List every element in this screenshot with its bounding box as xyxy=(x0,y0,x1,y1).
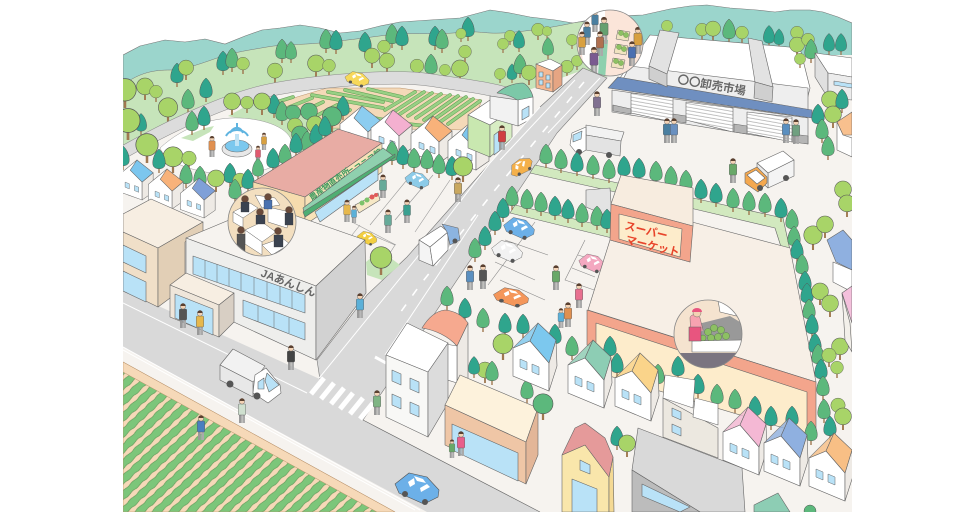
supermarket sign block top xyxy=(611,175,693,226)
front row houses xyxy=(513,323,853,501)
store side wall xyxy=(253,182,305,220)
market sign: 〇〇卸売市場 xyxy=(676,72,747,98)
supermarket right tree column xyxy=(786,209,830,423)
park people xyxy=(209,133,267,163)
JA upper windows xyxy=(193,256,305,313)
trees behind market xyxy=(661,19,847,55)
supermarket main roof xyxy=(588,222,816,382)
JA building xyxy=(186,205,366,360)
small orange building xyxy=(536,59,562,92)
supermarket parking xyxy=(488,222,600,300)
market interior circle outline xyxy=(674,300,742,368)
right edge pink house xyxy=(842,286,852,352)
JA window mullions xyxy=(205,260,292,333)
salmon arch building xyxy=(422,310,468,383)
parked sedans xyxy=(492,218,605,308)
office interior circle xyxy=(228,188,296,262)
supermarket sign text 1: スーパー xyxy=(623,219,669,243)
JA entrance xyxy=(170,273,234,337)
right side round trees xyxy=(804,181,855,440)
right edge blue house xyxy=(827,230,852,292)
supermarket front band xyxy=(587,310,816,432)
small lot tree xyxy=(370,247,392,275)
JA side wall xyxy=(316,240,366,360)
JA name sign: JAあんしん xyxy=(259,267,318,300)
store sign right: ニコニコ館 xyxy=(345,147,384,178)
orange truck xyxy=(745,151,794,192)
near road boundary xyxy=(363,420,540,512)
supermarket sign face xyxy=(610,204,693,262)
yellow roofed house xyxy=(562,423,614,512)
orange car on road xyxy=(507,152,536,182)
grey office bottom xyxy=(632,428,745,512)
JA roof xyxy=(186,205,365,286)
white delivery truck xyxy=(220,349,281,403)
mountains xyxy=(123,4,852,80)
main road xyxy=(317,68,607,420)
tan office building xyxy=(123,199,203,307)
teal roof bottom xyxy=(754,493,790,512)
left houses row xyxy=(118,160,215,218)
trees around store xyxy=(116,93,349,203)
farmland margin xyxy=(123,362,395,512)
market people xyxy=(498,91,800,183)
lower middle trees xyxy=(441,286,817,445)
curved road xyxy=(115,78,515,157)
market upper wall xyxy=(624,66,808,110)
supermarket sign text 2: マーケット xyxy=(624,233,681,259)
vegetable stand xyxy=(355,193,380,213)
street people xyxy=(179,293,381,440)
road dashes xyxy=(395,82,584,320)
stop line xyxy=(375,357,386,363)
market side trees xyxy=(812,89,848,160)
white apartment xyxy=(386,323,448,437)
crosswalk xyxy=(311,378,373,419)
trees by yellow house xyxy=(521,379,635,457)
upper row trees xyxy=(540,144,787,222)
bottom farmland xyxy=(123,362,395,512)
tan storefront xyxy=(445,375,538,484)
lower tree strip xyxy=(510,205,612,238)
market interior circle xyxy=(674,300,745,368)
main road lines xyxy=(307,78,600,393)
trees right of market xyxy=(789,26,817,68)
shop back trees xyxy=(386,141,473,182)
near road edge lines xyxy=(123,303,420,510)
store awning xyxy=(303,148,395,217)
JA lower windows xyxy=(243,300,305,340)
arched teal building xyxy=(490,83,533,126)
office interior circle outline xyxy=(228,188,296,256)
hill xyxy=(123,22,607,145)
wholesale market xyxy=(608,30,812,144)
lawn behind plaza xyxy=(228,104,340,152)
JA front wall xyxy=(186,238,316,360)
storefront people xyxy=(449,431,465,458)
grey parked truck xyxy=(586,188,612,218)
back vegetable field xyxy=(277,88,482,130)
store windows xyxy=(315,168,378,222)
market white truck xyxy=(570,125,624,158)
wholesale interior circle xyxy=(577,10,643,80)
delivery truck on road xyxy=(419,224,460,266)
market columns xyxy=(613,105,808,144)
hill trees xyxy=(114,17,583,135)
supermarket xyxy=(587,175,816,435)
blue car on street xyxy=(395,473,439,505)
store people xyxy=(344,175,462,233)
light green building xyxy=(468,100,512,157)
wholesale interior circle outline xyxy=(577,10,643,76)
blue parked car xyxy=(405,172,429,189)
supermarket sign panel xyxy=(619,214,682,257)
market shutters xyxy=(631,93,673,122)
upper tree strip xyxy=(530,165,790,250)
market pillar 2 xyxy=(748,38,773,87)
market roof xyxy=(620,34,810,97)
yellow parked car xyxy=(357,231,377,246)
ground xyxy=(123,48,852,512)
flat roof building xyxy=(663,375,718,458)
yellow car on curved road xyxy=(345,72,369,88)
farm store xyxy=(253,129,395,225)
lower row trees xyxy=(469,186,613,262)
market blue eave xyxy=(608,77,812,118)
near road xyxy=(123,290,540,512)
store roof xyxy=(253,129,382,197)
parking people xyxy=(466,264,583,328)
scene xyxy=(114,5,855,517)
store front wall xyxy=(305,143,382,225)
market pillar 1 xyxy=(649,30,679,74)
fountain xyxy=(222,123,252,157)
store parking lot xyxy=(340,170,450,280)
store sign left: 農産物直売所 xyxy=(307,166,352,203)
bottom right tree xyxy=(804,505,816,517)
far houses row xyxy=(340,106,489,170)
right orange house xyxy=(837,112,852,157)
market lower wall xyxy=(612,90,808,144)
far right building xyxy=(815,53,852,100)
lawn patch xyxy=(181,126,214,141)
park plaza xyxy=(160,118,292,175)
supermarket front inner xyxy=(596,323,807,435)
